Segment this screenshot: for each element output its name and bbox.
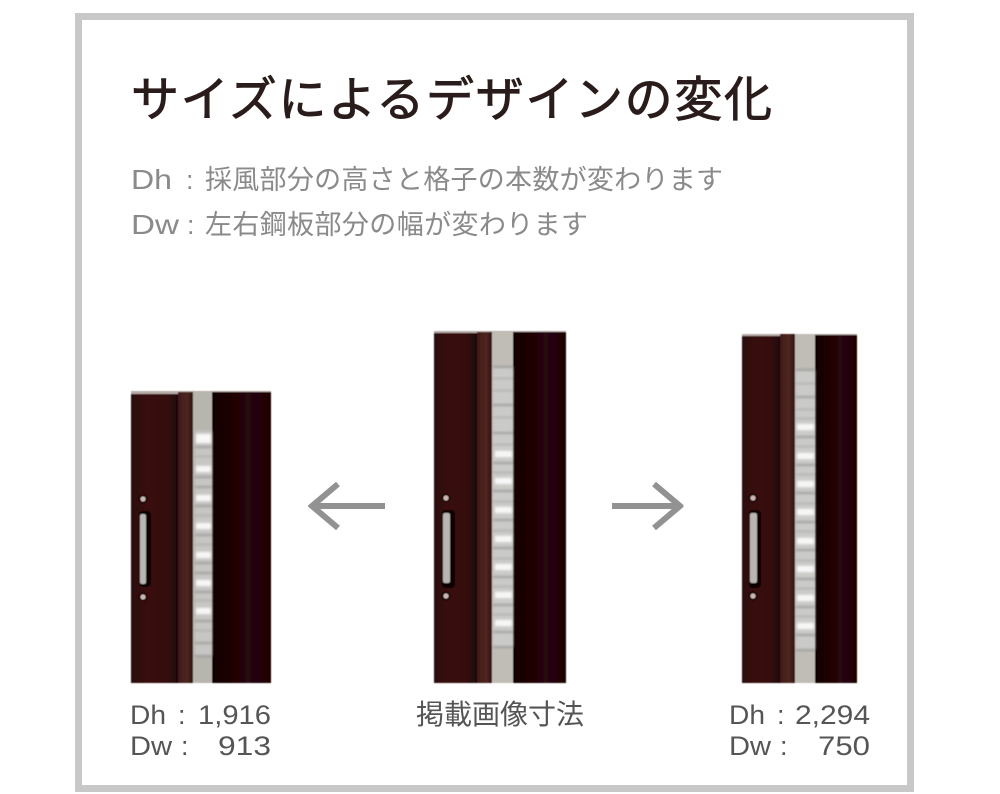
arrow: left — [312, 484, 385, 528]
glass slats — [195, 431, 212, 657]
label: right door dimensions: Dh — [729, 700, 765, 730]
label: right door dimensions — [729, 700, 870, 761]
label: left door dimensions: : — [178, 700, 186, 730]
label: left door dimensions: : — [181, 731, 189, 761]
label: right door dimensions: Dw — [729, 731, 772, 761]
description colon: Dh: : — [186, 165, 194, 195]
title: サイズによるデザインの変化 — [131, 74, 772, 127]
door handle — [138, 494, 151, 602]
glass slats — [493, 366, 513, 648]
label: right door dimensions: 750 — [818, 731, 870, 761]
label: left door dimensions: Dw — [130, 731, 173, 761]
label: right door dimensions: 2,294 — [795, 700, 870, 730]
door handle — [748, 494, 761, 600]
door: tall size (right) — [742, 334, 857, 683]
description text block — [131, 164, 723, 240]
label: right door dimensions: : — [777, 700, 785, 730]
description line: Dw: 左右鋼板部分の幅が変わります — [205, 210, 588, 240]
description line: Dh: 採風部分の高さと格子の本数が変わります — [205, 165, 723, 195]
door: published size (centre) — [434, 331, 566, 683]
label: left door dimensions — [130, 700, 271, 761]
label: centre door: 掲載画像寸法 — [416, 699, 584, 730]
door handle — [442, 494, 455, 600]
description label: Dh: Dh — [131, 164, 172, 195]
label: left door dimensions: Dh — [130, 700, 166, 730]
label: left door dimensions: 1,916 — [198, 700, 271, 730]
glass slats — [796, 369, 815, 651]
label: right door dimensions: : — [780, 731, 788, 761]
description colon: Dw: : — [187, 210, 195, 240]
arrow: right — [612, 484, 680, 528]
door: small size (left) — [131, 391, 271, 683]
label: left door dimensions: 913 — [218, 731, 271, 761]
description label: Dw: Dw — [131, 209, 180, 240]
